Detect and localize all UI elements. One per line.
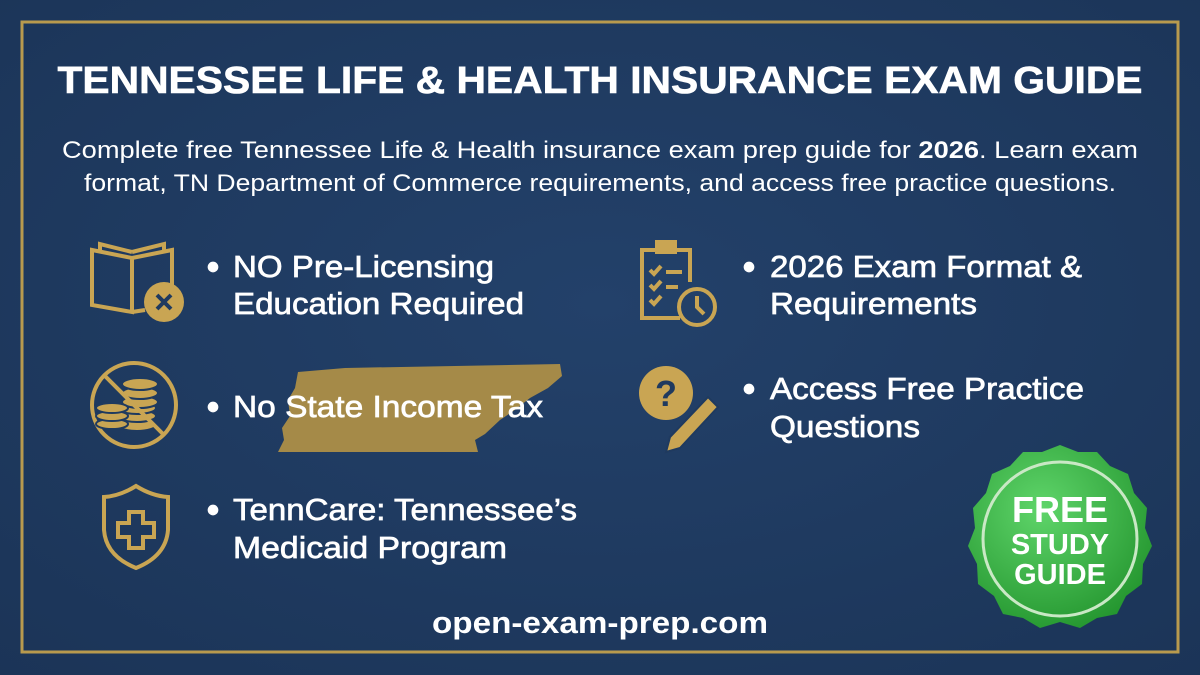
bullet 1 [208,249,524,321]
badge: free study guide [968,445,1152,628]
badge: free study guide: FREE [1012,489,1108,530]
bullet 5: Questions [770,409,920,444]
bullet 4: Requirements [770,286,977,321]
subtitle: Complete free Tennessee Life & Health insurance exam prep guide for 2026 . Learn exam [62,137,1138,164]
bullet 1: Education Required [233,286,524,321]
icon: no coins [92,363,176,447]
bullet 1: NO Pre-Licensing [233,249,494,284]
bullet 3 [208,492,577,565]
footer url: open-exam-prep.com [432,605,768,640]
icon: book with x [92,244,184,322]
title: TENNESSEE LIFE & HEALTH INSURANCE EXAM GUIDE [58,60,1142,102]
subtitle: format, TN Department of Commerce requirements, and access free practice questions. [84,170,1116,197]
icon: clipboard clock [642,242,715,325]
icon: question pencil: ? [655,373,677,414]
bullet 5: Access Free Practice [770,371,1084,406]
tennessee map shape [278,364,562,452]
bullet 4: 2026 Exam Format & [770,249,1082,284]
bullet 3: TennCare: Tennessee’s [233,492,577,527]
bullet 2: No State Income Tax [233,389,544,424]
icon: question pencil [639,366,718,452]
bullet 4 [744,249,1082,321]
badge: free study guide: GUIDE [1014,559,1106,591]
icon: shield cross [104,486,168,568]
badge: free study guide: STUDY [1011,529,1109,561]
bullet 3: Medicaid Program [233,530,507,565]
bullet 5 [744,371,1084,444]
subtitle [62,137,1138,197]
